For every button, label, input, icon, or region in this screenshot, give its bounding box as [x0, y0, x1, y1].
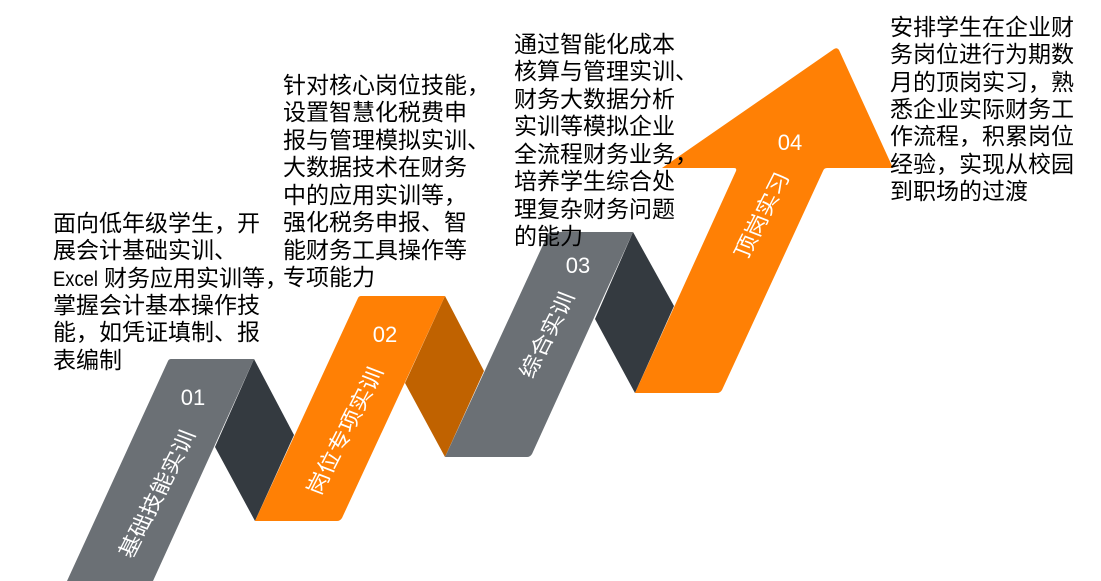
step 1 label: 基础技能实训: [114, 427, 200, 561]
text block: step 4 description: [890, 14, 1074, 204]
text block: step 2 description: [283, 72, 490, 290]
text block: step 4 description: 到职场的过渡: [890, 178, 1028, 204]
text block: step 3 description: 的能力: [514, 223, 583, 249]
text block: step 2 description: 中的应用实训等，: [283, 182, 467, 208]
step 2 label: 岗位专项实训: [302, 364, 388, 498]
text block: step 3 description: 全流程财务业务，: [514, 141, 698, 167]
step 2 number: 02: [373, 322, 397, 347]
text block: step 1 description: Excel: [53, 268, 98, 291]
step 2 ribbon: [255, 296, 445, 521]
text block: step 2 description: 强化税务申报、智: [283, 209, 467, 235]
text block: step 4 description: 务岗位进行为期数: [890, 41, 1074, 67]
step 4 arrow: [635, 48, 893, 393]
text block: step 4 description: 悉企业实际财务工: [890, 96, 1074, 122]
text block: step 3 description: 通过智能化成本: [514, 31, 675, 57]
text block: step 3 description: 理复杂财务问题: [514, 196, 675, 222]
text block: step 1 description: [53, 210, 288, 373]
fold: step 1 dark: [215, 359, 294, 521]
text block: step 1 description: 展会计基础实训、: [53, 237, 237, 263]
text block: step 1 description: 能，如凭证填制、报: [53, 319, 260, 345]
text block: step 3 description: 核算与管理实训、: [514, 58, 698, 84]
step 4 label: 顶岗实习: [730, 169, 795, 261]
text block: step 2 description: 能财务工具操作等: [283, 237, 467, 263]
text block: step 2 description: 针对核心岗位技能，: [283, 72, 490, 98]
text block: step 1 description: 财务应用实训等，: [104, 265, 288, 291]
text block: step 2 description: 大数据技术在财务: [283, 154, 467, 180]
text block: step 1 description: 掌握会计基本操作技: [53, 292, 260, 318]
text block: step 4 description: 作流程，积累岗位: [890, 123, 1074, 149]
fold: step 2 dark orange: [405, 296, 484, 457]
text block: step 3 description: 财务大数据分析: [514, 86, 675, 112]
fold: step 3 dark: [595, 232, 674, 393]
step 3 number: 03: [566, 253, 590, 278]
text block: step 2 description: 设置智慧化税费申: [283, 99, 467, 125]
text block: step 3 description: 培养学生综合处: [514, 168, 675, 194]
text block: step 1 description: 面向低年级学生，开: [53, 210, 260, 236]
text block: step 2 description: 报与管理模拟实训、: [283, 127, 490, 153]
step 1 number: 01: [181, 385, 205, 410]
step 3 label: 综合实训: [515, 289, 580, 381]
text block: step 3 description: [514, 31, 698, 249]
step 1 ribbon: [67, 359, 254, 581]
text block: step 4 description: 安排学生在企业财: [890, 14, 1074, 40]
text block: step 4 description: 经验，实现从校园: [890, 151, 1074, 177]
step 4 number: 04: [778, 130, 802, 155]
step 3 ribbon: [445, 232, 633, 457]
text block: step 3 description: 实训等模拟企业: [514, 113, 675, 139]
text block: step 4 description: 月的顶岗实习，熟: [890, 69, 1074, 95]
text block: step 2 description: 专项能力: [283, 264, 375, 290]
text block: step 1 description: 表编制: [53, 347, 122, 373]
